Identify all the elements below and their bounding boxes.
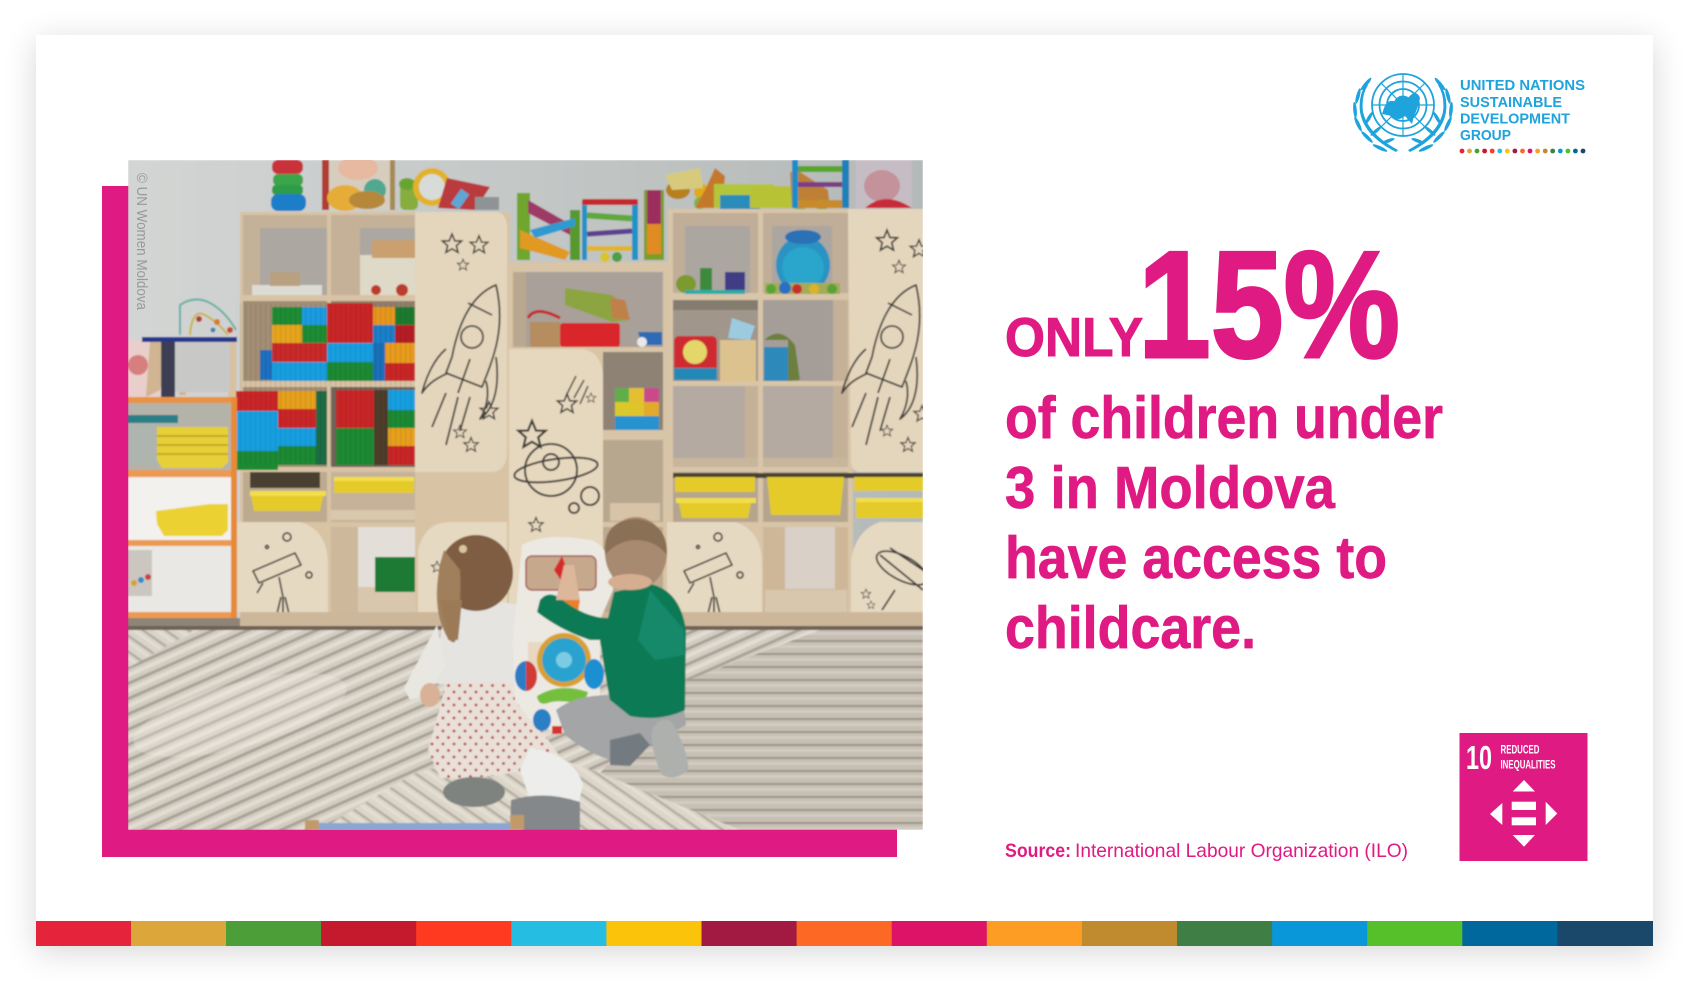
UN Sustainable Development Group logo — [1353, 74, 1585, 153]
wall — [128, 160, 923, 630]
SDG 10 reduced inequalities tile: REDUCED — [1500, 744, 1540, 756]
headline statistic: ONLY — [1005, 306, 1143, 368]
logo wordmark: SUSTAINABLE — [1460, 94, 1562, 111]
boy — [537, 517, 688, 778]
logo wordmark: DEVELOPMENT — [1460, 110, 1570, 128]
centre shelf unit — [508, 262, 668, 628]
left low shelf with orange frame — [128, 397, 237, 618]
shelf unit left — [240, 212, 510, 628]
UN emblem — [1353, 74, 1453, 153]
source line: International Labour Organization (ILO) — [1075, 840, 1408, 862]
headline statement: of children under — [1005, 385, 1443, 451]
rocket door left — [415, 212, 507, 472]
headline statement: 3 in Moldova — [1005, 455, 1336, 521]
SDG colour strip — [36, 921, 1653, 946]
logo wordmark: GROUP — [1460, 127, 1511, 144]
headline statistic: 15% — [1138, 220, 1400, 390]
rug — [125, 630, 923, 830]
top toys: left side — [271, 156, 499, 211]
logo wordmark: UNITED NATIONS — [1460, 77, 1585, 94]
SDG 10 reduced inequalities tile: INEQUALITIES — [1500, 760, 1556, 772]
logo wordmark — [1460, 77, 1585, 144]
lower doors with telescopes — [236, 521, 923, 613]
toy blocks — [236, 303, 428, 470]
small toys upper cell — [676, 275, 696, 293]
activity table with beads — [128, 299, 237, 397]
photo: children playing with toys in a nursery — [125, 156, 932, 831]
headline statement: have access to — [1005, 525, 1387, 591]
activity toy — [513, 537, 613, 735]
top toys: centre — [517, 160, 912, 262]
SDG 10 reduced inequalities tile: 10 — [1466, 739, 1492, 776]
pink offset frame behind photo — [102, 186, 897, 857]
headline statement: childcare. — [1005, 595, 1256, 661]
yellow trays — [250, 477, 923, 518]
logo colour dots — [1460, 149, 1585, 153]
telephone toy — [673, 335, 718, 370]
rocket door right — [842, 209, 930, 472]
cosmic door with planet — [508, 348, 604, 605]
blue toy edge at bottom — [305, 815, 524, 831]
icon: inequality arrows — [1490, 780, 1557, 847]
headline statistic — [1005, 220, 1400, 390]
SDG 10 reduced inequalities tile — [1460, 733, 1588, 861]
shelf base and floor — [128, 612, 923, 632]
headline statement — [1005, 385, 1443, 661]
girl — [404, 535, 583, 830]
photo credit: © UN Women Moldova — [133, 173, 150, 311]
right shelf unit — [668, 209, 923, 628]
source line: Source: — [1005, 840, 1071, 862]
clock toy — [775, 240, 831, 284]
